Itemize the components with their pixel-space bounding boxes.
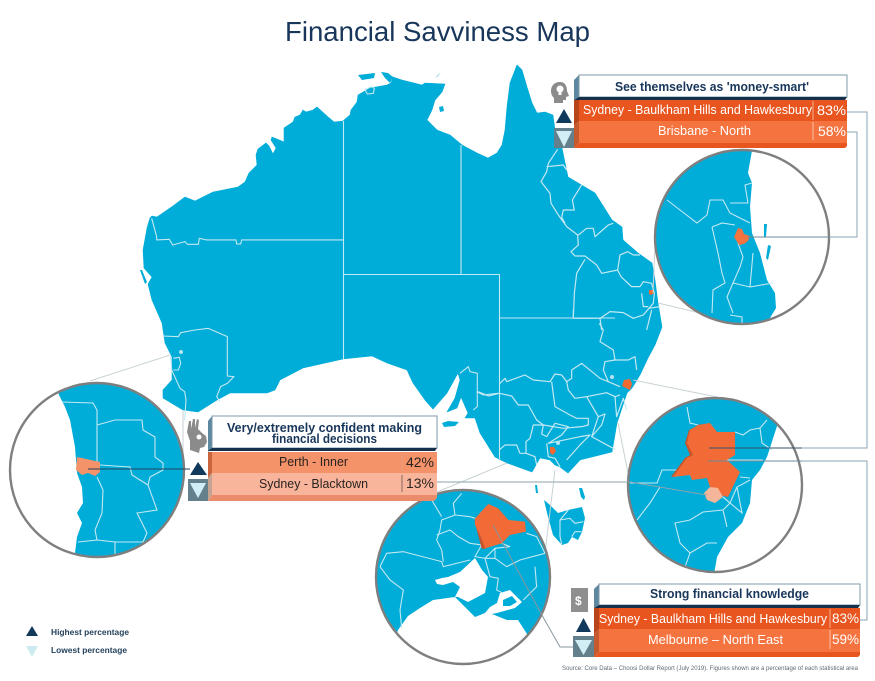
highlighted region: Brisbane - North [734,228,750,245]
mainland [143,65,662,473]
row: lowest [574,121,847,148]
circle: Melbourne detail [374,488,552,666]
heading box [594,584,860,608]
heading box: Strong financial knowledge [650,587,809,601]
circle: Brisbane detail [650,145,829,330]
row: highest: Sydney - Baulkham Hills and Hawkesbury [583,102,812,117]
row: highest: 42% [406,455,434,470]
leader lines from map to circles [90,245,717,553]
heading box [574,75,847,100]
row: lowest: Sydney - Blacktown [259,477,368,491]
source note: Source: Core Data – Choosi Dollar Report (July 2019). Figures shown are a percentage of each statistical area [562,665,858,672]
islands [140,72,585,545]
heading box: See themselves as 'money-smart' [615,80,809,94]
legend: lowest: Lowest percentage [51,646,127,655]
row: lowest: 13% [406,476,434,491]
row: highest [574,100,847,126]
row: lowest: 59% [832,632,859,647]
row: highest: 83% [832,611,859,626]
icon: dollar note: $ [575,594,582,608]
icon: head with lightbulb [551,82,569,103]
icon: lowest triangle tile [554,128,574,148]
inland water dots [179,350,614,445]
row: highest: Perth - Inner [279,455,348,469]
title: Financial Savviness Map [285,16,590,47]
row: highest [594,608,860,634]
row: lowest: Melbourne – North East [648,632,783,647]
highlighted region: Perth - Inner [76,457,100,476]
state and region boundaries [152,87,660,544]
icon: highest triangle [576,618,591,632]
icon: OK hand [187,419,207,453]
highlighted region: Melbourne - North East [474,519,486,549]
panel: see themselves as money-smart [551,75,847,148]
row: lowest [594,629,860,657]
panel: very/extremely confident making financial decisions [187,416,437,501]
icon: lowest triangle tile [573,636,594,657]
icon: highest triangle [556,109,572,123]
row: lowest [208,473,437,501]
highlighted region: Blacktown [704,487,723,503]
row: highest: Sydney - Baulkham Hills and Hawkesbury [599,611,827,626]
row: lowest: Brisbane - North [658,123,751,138]
row: lowest: 58% [818,124,846,139]
legend: highest: Highest percentage [51,628,129,637]
legend [26,626,129,657]
highlighted regions on map [550,290,654,455]
icon: lowest triangle tile [188,479,208,501]
highlighted region: Baulkham Hills and Hawkesbury [671,423,703,477]
icon: highest triangle [190,462,207,475]
heading box: financial decisions [272,432,377,446]
map: Australia [140,65,662,545]
connector lines [88,112,867,647]
circle: Sydney detail [620,390,802,580]
heading box [208,416,437,452]
row: highest: 83% [817,103,846,118]
row: highest [208,452,437,478]
circle: Perth detail [0,380,190,560]
heading box: Very/extremely confident making [227,421,422,435]
panel: strong financial knowledge [571,584,860,657]
icon: dollar note [571,588,588,612]
